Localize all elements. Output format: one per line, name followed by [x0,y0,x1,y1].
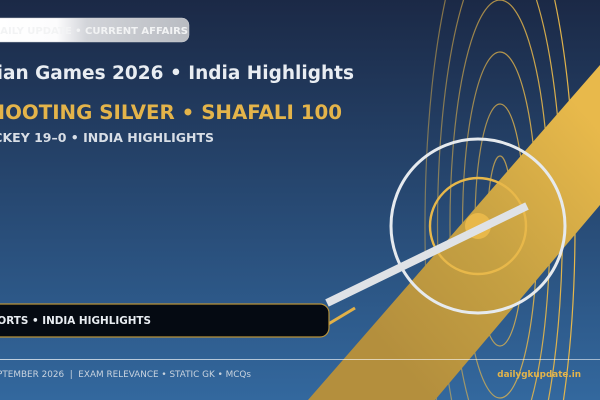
top badge [0,18,189,42]
small gold accent line [325,308,355,326]
diagonal gold band [308,65,600,400]
white rifle line [327,206,527,303]
target rings and centre [391,139,565,313]
concentric gold ellipses [425,0,575,400]
website: dailygkupdate.in [497,370,581,380]
dark pill label [0,304,329,337]
footer divider [0,359,600,360]
